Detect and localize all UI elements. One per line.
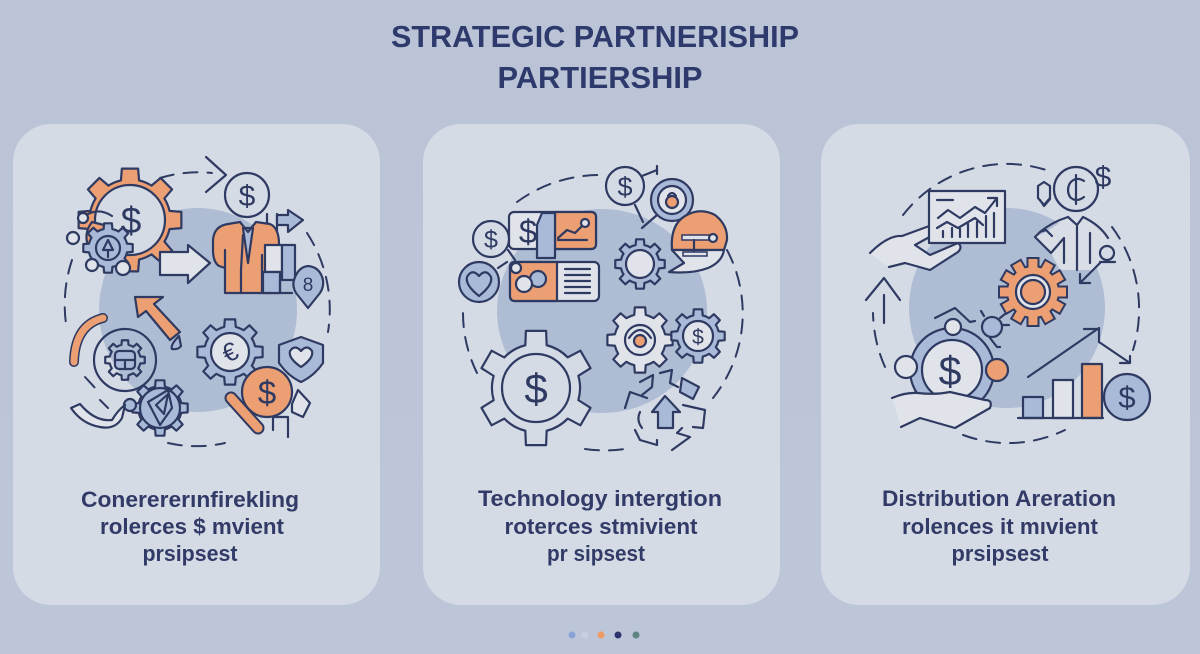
panel caption: Distribution Areration [882, 486, 1116, 511]
icon: euro gear [197, 319, 263, 385]
icon: large gear [481, 331, 591, 445]
icon: talking head [669, 211, 727, 272]
dashed cycle ring [873, 164, 1139, 443]
icon: location pin [293, 266, 323, 308]
icon: businessperson jacket [213, 222, 279, 293]
panel caption [882, 486, 1116, 566]
icon: small blue gear with nodes [67, 211, 133, 275]
icon: dollar coin [225, 173, 269, 217]
icon: pointing hand [870, 225, 960, 270]
icon: chart card: $ [519, 213, 537, 250]
icon: dollar coin top: $ [617, 172, 633, 202]
icon: data card [510, 262, 599, 301]
icon: orange gear with dollar [79, 169, 181, 271]
icon: dollar coin top [606, 166, 657, 228]
icon: white arrow [160, 245, 210, 283]
icon: blue dollar gear [671, 309, 725, 363]
icon: pale target gear [607, 307, 673, 373]
panel: distribution card [821, 124, 1190, 605]
pagination dots [568, 632, 640, 638]
icon: dollar coin left: $ [484, 226, 498, 254]
icon: heart shield [279, 337, 323, 382]
icon: orange arc [74, 318, 103, 362]
icon: chevron arrow [206, 157, 226, 192]
icon: money ring: $ [939, 348, 962, 394]
icon: orange gear with dollar: $ [121, 200, 141, 241]
panel caption: rolences it mıvient [902, 514, 1099, 539]
icon: dollar coin left [473, 221, 515, 268]
icon: large gear: $ [524, 365, 548, 412]
icon: orange bar [231, 398, 258, 428]
icon: drop [172, 336, 181, 349]
icon: person with coin head: $ [1095, 161, 1112, 194]
icon: bar chart [1018, 364, 1103, 418]
dashed cycle ring [65, 172, 330, 446]
icon: blue gear [615, 239, 665, 289]
panel caption: pr sipsest [547, 541, 646, 566]
icon: line chart card [929, 191, 1005, 243]
icon: blue gear with shield [124, 380, 188, 436]
dashed cycle ring [463, 175, 743, 450]
icon: circled gear [94, 329, 156, 391]
icon: up arrow [866, 278, 900, 323]
panel caption [81, 487, 299, 566]
panel: conferencing card [13, 124, 380, 605]
icon: heart coin [459, 262, 499, 302]
title [391, 19, 799, 95]
icon: broken gear with up arrow [625, 370, 705, 450]
icon: orange dollar coin: $ [258, 374, 276, 411]
icon: target badge [651, 179, 693, 221]
icon: orange arrow [135, 297, 180, 340]
icon: open hand [892, 392, 991, 428]
background blob [497, 209, 707, 413]
panel caption: prsipsest [952, 541, 1049, 566]
icon: orange dollar coin [242, 367, 292, 417]
panel: technology integration card [423, 124, 780, 605]
icon: dollar coin: $ [239, 180, 256, 213]
title: PARTIERSHIP [498, 60, 702, 95]
icon: location pin: 8 [303, 275, 313, 296]
background blob [99, 208, 297, 412]
icon: buildings [263, 245, 295, 293]
icon: small white arrow [273, 390, 310, 437]
icon: blue dollar coin [1104, 374, 1150, 420]
icon: person with coin head [1035, 161, 1115, 283]
icon: growth arrows [1028, 328, 1130, 377]
panel caption: rolerces $ mvient [100, 514, 285, 539]
icon: blue dollar coin: $ [1118, 380, 1136, 415]
icon: money ring [895, 308, 1008, 412]
panel caption: Technology intergtion [478, 486, 722, 511]
title: STRATEGIC PARTNERISHIP [391, 19, 799, 54]
panel caption: roterces stmivient [504, 514, 698, 539]
icon: chart card [509, 212, 596, 258]
icon: blue dollar gear: $ [692, 326, 704, 349]
panel caption: prsipsest [142, 541, 238, 566]
icon: small blue arrow [267, 210, 303, 240]
panel caption [478, 486, 722, 566]
icon: orange gear [1000, 259, 1066, 325]
icon: small bulb gear [981, 311, 1009, 347]
panel caption: Conerererınfirekling [81, 487, 299, 512]
icon: euro gear: € [217, 335, 243, 369]
icon: open hand [71, 404, 125, 428]
background blob [909, 208, 1105, 408]
